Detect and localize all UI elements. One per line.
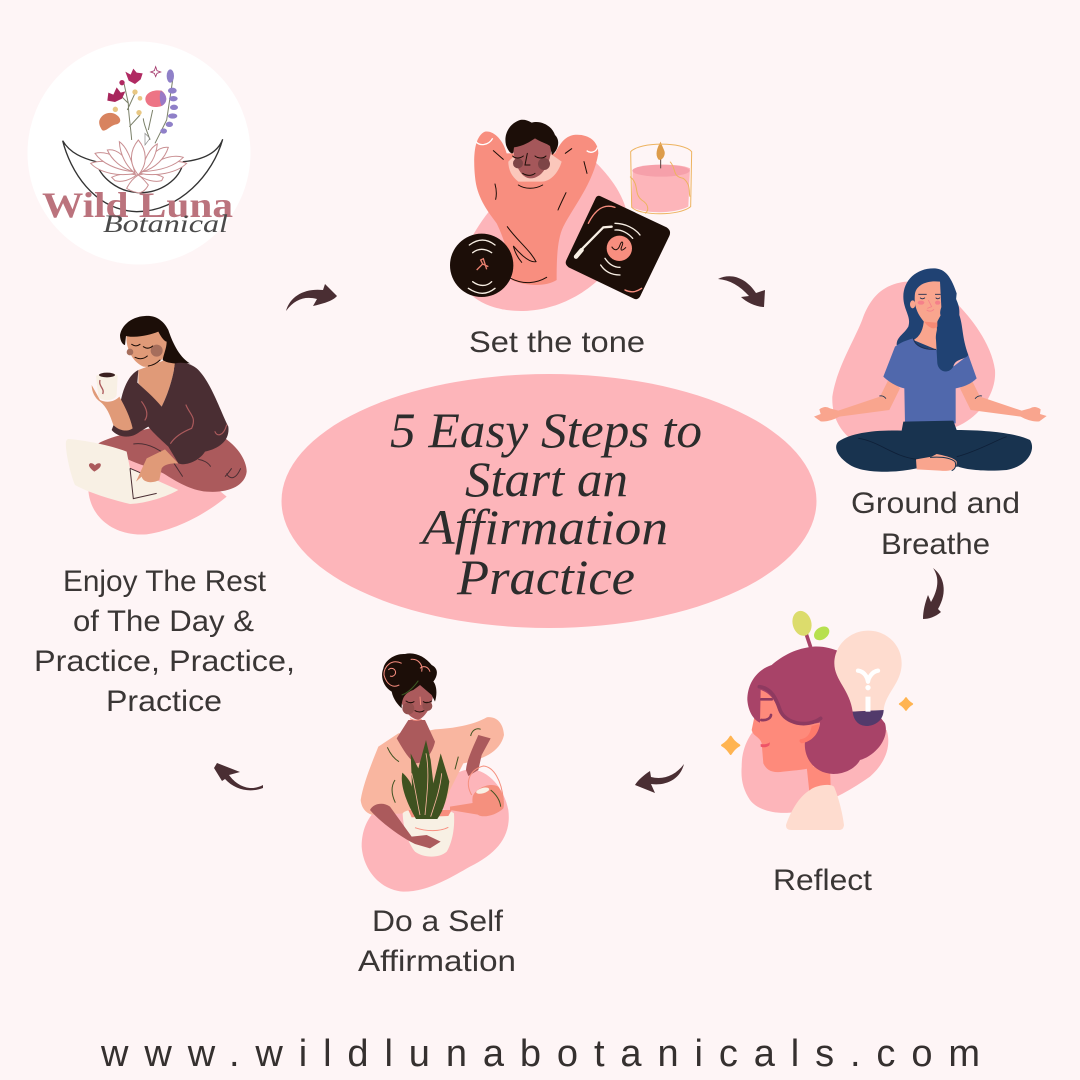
step 2: Ground and Breathe	[814, 268, 1047, 561]
logo artwork: moon, lotus and flowers	[63, 67, 223, 212]
logo wordmark: Wild Luna	[42, 185, 233, 225]
label line 4: Practice	[106, 685, 222, 718]
label line 2: Breathe	[881, 528, 990, 561]
logo background circle	[28, 42, 250, 264]
label: Ground and	[851, 487, 1020, 520]
label: Do a Self	[372, 905, 504, 938]
label line 2: Affirmation	[358, 945, 516, 978]
arrow 3 to 4	[635, 764, 684, 793]
arrow 4 to 5	[214, 763, 263, 790]
step 3: Reflect	[722, 609, 912, 897]
arrow 1 to 2	[718, 276, 765, 307]
pink ellipse	[282, 374, 816, 628]
step 4: Do a Self Affirmation	[358, 653, 516, 978]
website footer: www.wildlunabotanicals.com	[100, 1033, 980, 1075]
illustration: woman with laptop and coffee	[66, 316, 247, 535]
step 1: Set the tone	[450, 120, 692, 359]
arrow 5 to 1	[286, 284, 337, 311]
title: Practice	[456, 549, 635, 605]
title: Affirmation	[419, 499, 668, 555]
label: Enjoy The Rest	[63, 565, 267, 598]
label line 2: of The Day &	[73, 605, 254, 638]
illustration: woman watering plant	[361, 653, 509, 892]
step 5: Enjoy The Rest of The Day	[34, 316, 295, 718]
label line 3: Practice, Practice,	[34, 645, 295, 678]
logo: Wild Luna Botanicals	[28, 42, 250, 264]
arrow 2 to 3	[923, 568, 944, 619]
illustration: relaxing person, vinyl and candle	[450, 120, 692, 311]
title: 5 Easy Steps to	[390, 402, 702, 458]
title	[390, 402, 702, 605]
illustration: head with light bulb	[722, 609, 912, 830]
left forearm over pot	[370, 804, 441, 848]
central title ellipse	[282, 374, 816, 628]
logo script word: Botanical	[103, 211, 228, 238]
illustration: meditating woman	[814, 268, 1047, 472]
label: Set the tone	[469, 326, 645, 359]
label: Reflect	[773, 864, 873, 897]
title: Start an	[465, 451, 628, 507]
